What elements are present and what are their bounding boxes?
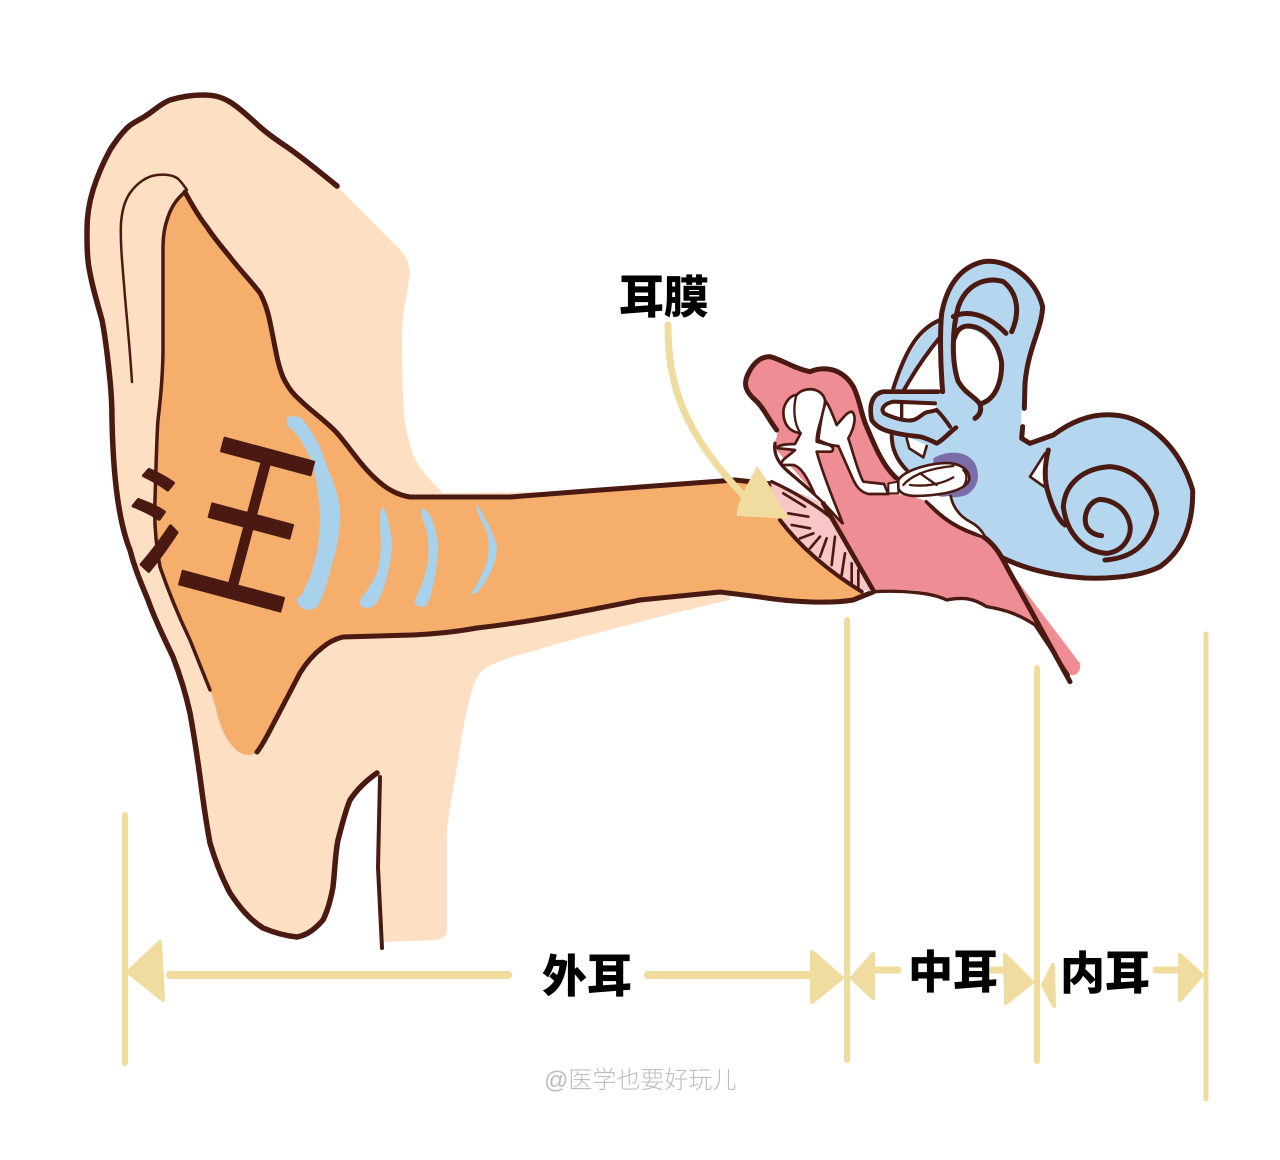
eardrum arrow [668,325,790,519]
incus [818,402,888,494]
middle ear range [847,620,1032,1060]
sound waves [287,416,497,610]
label: eardrum: 耳膜 [619,261,709,326]
oval window [933,453,978,498]
label: inner ear: 内耳 [1060,937,1150,1002]
sound character: 氵 [129,432,247,594]
outer ear skin [87,95,740,942]
inner ear labyrinth [870,261,1193,578]
ear outline [87,95,873,948]
malleus [777,389,843,523]
label: middle ear: 中耳 [908,936,998,1001]
dimension brackets [125,620,1206,1099]
inner ear range [1037,634,1206,1099]
outer ear range [125,815,842,1063]
sound character: 王 [160,364,345,660]
watermark: @医学也要好玩儿 [544,1067,736,1094]
ossicles [777,389,985,537]
eardrum [770,480,874,592]
label: outer ear: 外耳 [542,940,632,1005]
ear canal and concha [155,192,868,755]
middle ear cavity [745,357,1080,675]
stapes [888,482,898,493]
middle and inner ear [745,261,1193,682]
lateral semicircular canal [871,392,956,470]
